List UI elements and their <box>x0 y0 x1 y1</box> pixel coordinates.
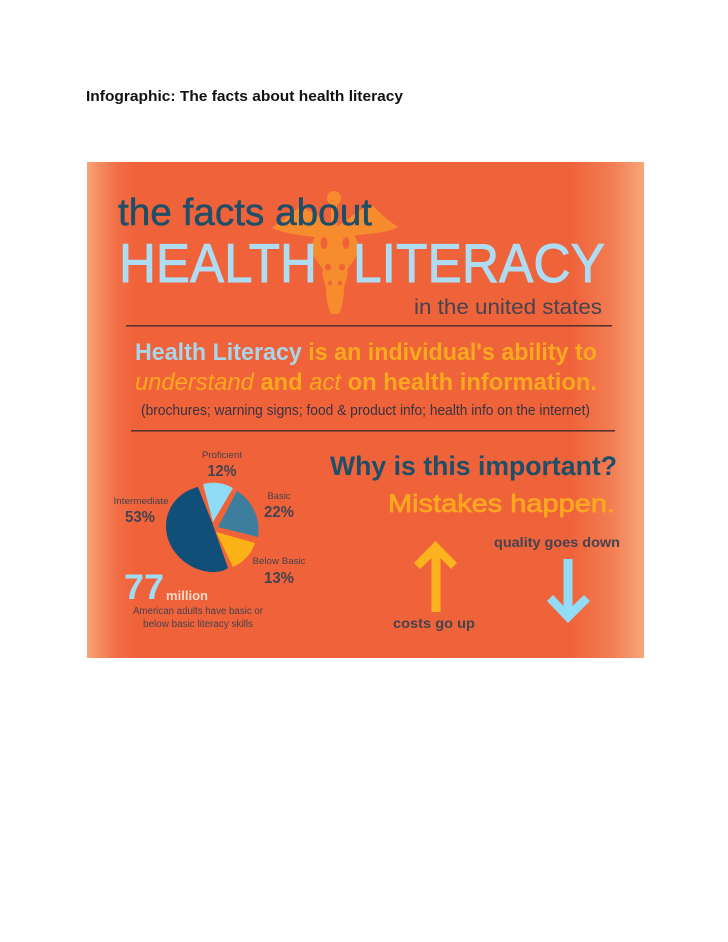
heading: the facts about: the facts about <box>118 192 372 234</box>
label: basic <box>264 491 294 521</box>
heading: in the united states: in the united states <box>414 296 602 319</box>
panel: infographic background <box>87 162 644 658</box>
label: costs go up: costs go up <box>393 616 475 631</box>
definition line 1: Health Literacy is an individual's ability to <box>135 339 597 366</box>
label: below basic: Below Basic <box>252 556 306 567</box>
stat caption <box>133 606 264 630</box>
arrow up: costs <box>414 541 457 612</box>
stat caption: below basic literacy skills <box>143 619 253 630</box>
label: proficient: Proficient <box>202 450 242 461</box>
heading: why is this important: Why is this important? <box>330 451 617 481</box>
stat: 77 million: million <box>166 589 208 603</box>
label: quality goes down: quality goes down <box>494 535 620 550</box>
label: below basic <box>252 556 306 587</box>
definition text block <box>135 339 597 396</box>
label: basic: Basic <box>268 491 291 502</box>
definition line 2: understand and act on health information. <box>135 369 597 396</box>
heading: HEALTH LITERACY: LITERACY <box>353 232 605 294</box>
label: proficient: 12% <box>208 463 237 480</box>
pie chart <box>166 483 259 572</box>
heading: HEALTH LITERACY <box>119 232 605 294</box>
divider bottom <box>131 430 615 432</box>
label: intermediate: 53% <box>125 509 155 526</box>
stat: 77 million <box>124 568 208 607</box>
arrow down: quality <box>547 559 590 623</box>
label: intermediate: Intermediate <box>114 496 168 507</box>
divider top <box>126 325 612 327</box>
slice: proficient 12% <box>203 483 233 522</box>
label: below basic: 13% <box>264 570 294 587</box>
stat caption: American adults have basic or <box>133 606 264 617</box>
label: proficient <box>202 450 242 480</box>
page title: Infographic: The facts about health literacy <box>86 89 404 105</box>
slice: below basic 13% <box>216 532 255 567</box>
label: basic: 22% <box>264 504 294 521</box>
slice: basic 22% <box>218 491 259 537</box>
heading: HEALTH LITERACY: HEALTH <box>119 232 317 294</box>
slice: intermediate 53% <box>166 487 228 572</box>
definition examples: (brochures; warning signs; food & product info; health info on the internet) <box>141 403 590 419</box>
icon: caduceus <box>272 191 398 314</box>
label: intermediate <box>114 496 168 526</box>
subheading: mistakes happen: Mistakes happen. <box>388 490 615 518</box>
stat: 77 million: 77 <box>124 568 164 607</box>
